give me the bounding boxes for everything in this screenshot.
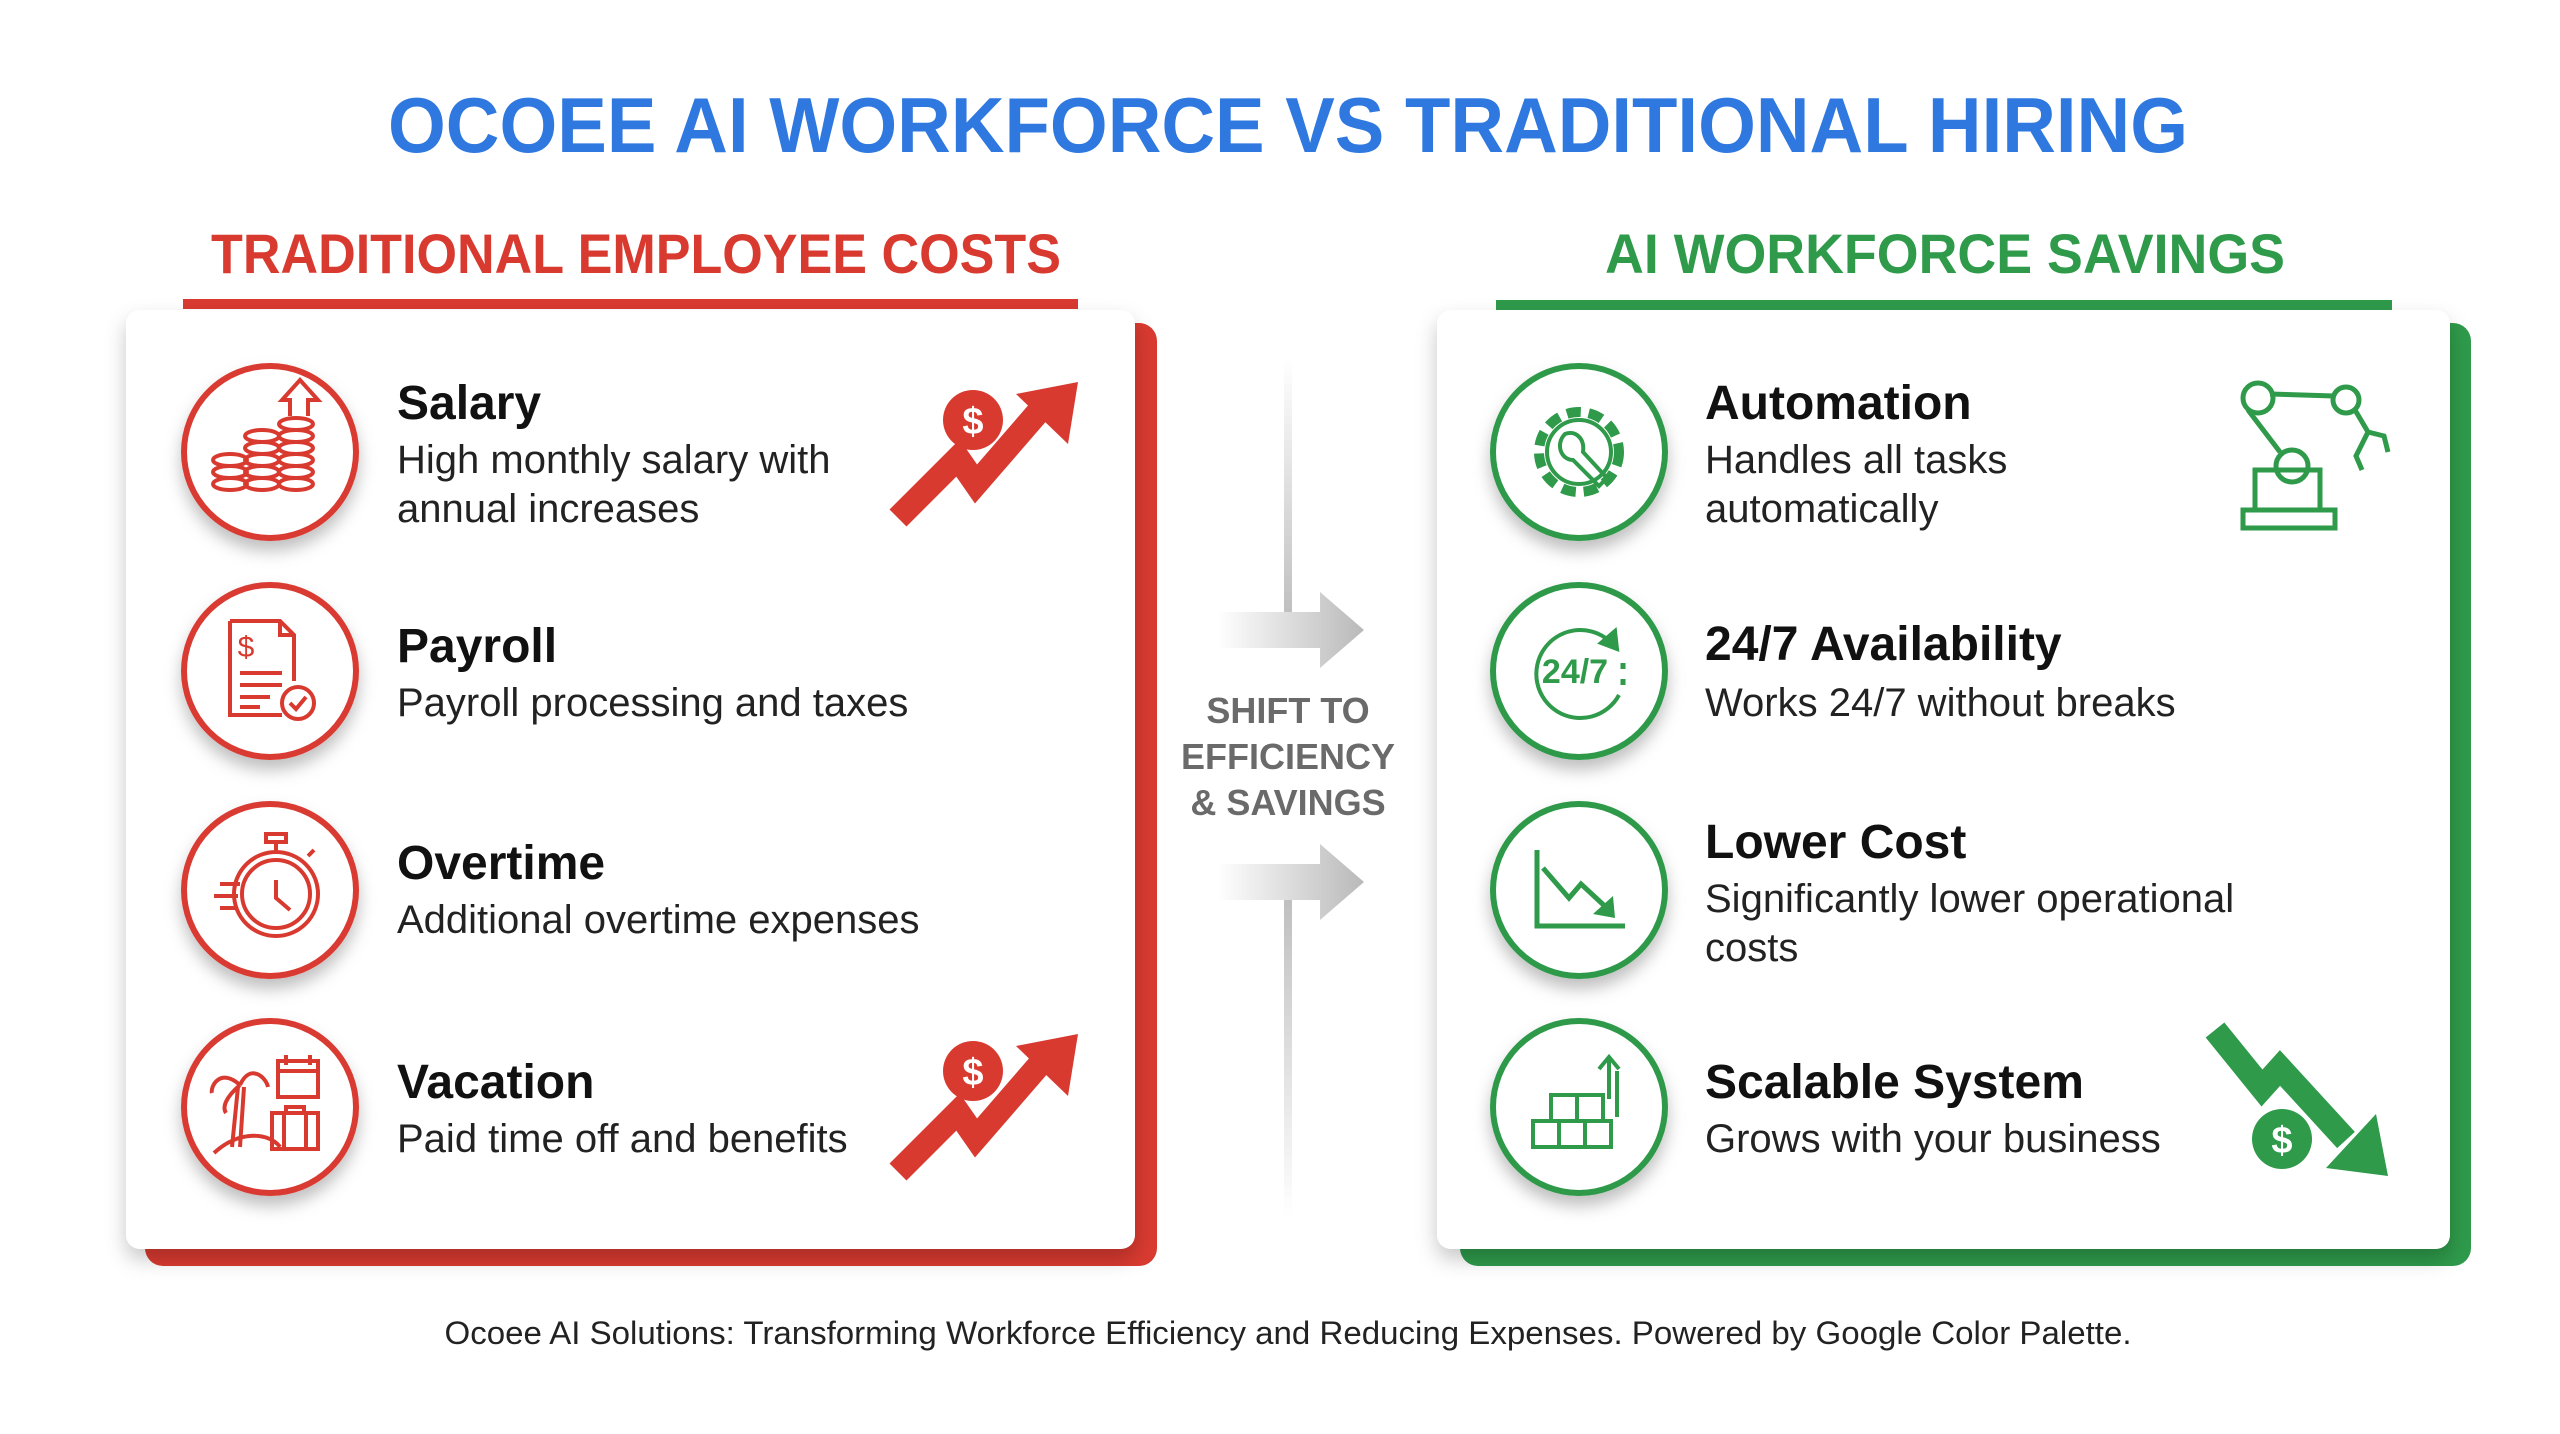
- text: vacation: Paid time off and benefits: [397, 1117, 848, 1161]
- text: shift to efficiency: EFFICIENCY: [1181, 736, 1395, 777]
- item: salary: [184, 366, 1078, 538]
- text: vacation: Vacation: [397, 1056, 594, 1109]
- text: availability: 24/7 Availability: [1705, 618, 2062, 671]
- arrow: lower: [1217, 844, 1364, 920]
- text: shift to efficiency: [1181, 690, 1395, 823]
- text: shift to efficiency: & SAVINGS: [1190, 782, 1386, 823]
- text: overtime: Overtime: [397, 837, 605, 890]
- text: payroll: Payroll processing and taxes: [397, 681, 908, 725]
- text: payroll: [397, 620, 908, 725]
- arrow: rising cost: $: [962, 1052, 984, 1094]
- item: payroll: [184, 585, 908, 757]
- text: lower cost: Lower Cost: [1705, 816, 1966, 869]
- icon: puzzle growth: [1493, 1021, 1665, 1193]
- panel: ai savings: [1437, 310, 2471, 1266]
- text: automation: Automation: [1705, 377, 1972, 430]
- text: lower cost: [1705, 816, 2234, 970]
- icon: 24/7: 24/7: [1542, 653, 1608, 691]
- icon: payroll document: [184, 585, 356, 757]
- item: scalable: [1493, 1021, 2388, 1193]
- icon: coins: [184, 366, 356, 538]
- item: availability: [1493, 585, 2176, 757]
- item: overtime: [184, 804, 920, 976]
- icon: robot arm: [2243, 383, 2388, 528]
- footer: Ocoee AI Solutions: Transforming Workforce Efficiency and Reducing Expenses. Powered by Google Color Palette.: [444, 1315, 2132, 1351]
- text: salary: [397, 377, 830, 531]
- icon: stopwatch: [184, 804, 356, 976]
- text: vacation: [397, 1056, 848, 1161]
- text: automation: Handles all tasks: [1705, 438, 2007, 482]
- text: scalable: Scalable System: [1705, 1056, 2084, 1109]
- heading: ai workforce savings: [1496, 222, 2392, 310]
- text: scalable: [1705, 1056, 2161, 1161]
- arrow: upper: [1217, 592, 1364, 668]
- icon: payroll document: $: [238, 631, 255, 664]
- text: scalable: Grows with your business: [1705, 1117, 2161, 1161]
- divider: shift arrows: [1181, 359, 1395, 1217]
- icon: 24/7: [1493, 585, 1665, 757]
- text: shift to efficiency: SHIFT TO: [1206, 690, 1370, 731]
- text: automation: automatically: [1705, 487, 1938, 531]
- text: automation: [1705, 377, 2007, 531]
- text: overtime: Additional overtime expenses: [397, 898, 920, 942]
- icon: gear wrench: [1493, 366, 1665, 538]
- item: vacation: [184, 1021, 1078, 1193]
- title: OCOEE AI WORKFORCE VS TRADITIONAL HIRING: [388, 81, 2188, 169]
- text: lower cost: Significantly lower operational: [1705, 877, 2234, 921]
- text: salary: High monthly salary with: [397, 438, 830, 482]
- text: payroll: Payroll: [397, 620, 557, 673]
- arrow: rising cost: [898, 382, 1078, 518]
- arrow: rising cost: [898, 1034, 1078, 1172]
- arrow: falling cost: $: [2271, 1120, 2293, 1162]
- item: lower cost: [1493, 804, 2234, 976]
- text: salary: Salary: [397, 377, 541, 430]
- heading: ai workforce savings: AI WORKFORCE SAVINGS: [1605, 222, 2285, 285]
- heading: traditional employee costs: [183, 222, 1078, 309]
- text: salary: annual increases: [397, 487, 699, 531]
- text: overtime: [397, 837, 920, 942]
- icon: down chart: [1493, 804, 1665, 976]
- heading: traditional employee costs: TRADITIONAL EMPLOYEE COSTS: [211, 222, 1061, 285]
- panel: traditional costs: [126, 310, 1157, 1266]
- text: availability: [1705, 618, 2176, 725]
- icon: palm and suitcase: [184, 1021, 356, 1193]
- text: lower cost: costs: [1705, 926, 1798, 970]
- item: automation: [1493, 366, 2388, 538]
- text: availability: Works 24/7 without breaks: [1705, 681, 2176, 725]
- arrow: falling cost: [2215, 1030, 2388, 1176]
- arrow: rising cost: $: [962, 401, 984, 443]
